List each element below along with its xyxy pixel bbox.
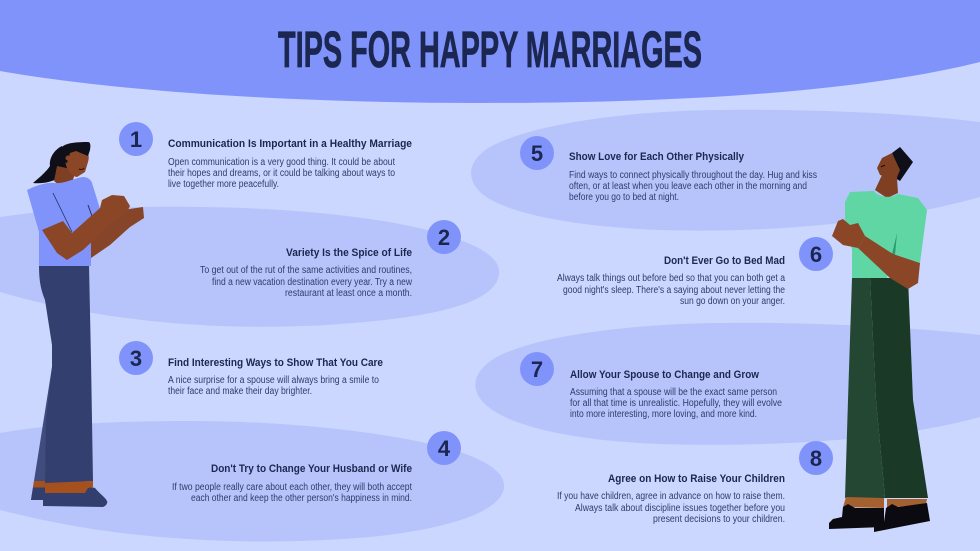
hair bbox=[60, 142, 90, 163]
body 5: often, or at least when you leave each other in the morning and bbox=[569, 181, 807, 192]
body 1: live together more peacefully. bbox=[168, 179, 279, 190]
shirt bbox=[845, 191, 927, 278]
body 2: To get out of the rut of the same activities and routines, bbox=[200, 265, 412, 276]
number badge 3: 3 bbox=[130, 346, 142, 371]
far arm bbox=[91, 207, 144, 258]
body 3: their face and make their day brighter. bbox=[168, 386, 312, 397]
far ankle bbox=[33, 481, 46, 488]
number badge 5: 5 bbox=[531, 141, 543, 166]
background blob: tip 2 bbox=[0, 207, 499, 327]
body 3 bbox=[168, 375, 379, 397]
trousers bbox=[39, 265, 93, 484]
smile bbox=[881, 165, 885, 167]
heading 3: Find Interesting Ways to Show That You Care bbox=[168, 357, 383, 369]
body 7: into more interesting, more loving, and more kind. bbox=[570, 409, 757, 420]
shirt bbox=[27, 177, 101, 266]
body 6: good night's sleep. There's a saying about never letting the bbox=[563, 285, 785, 296]
number badge 6: 6 bbox=[810, 242, 822, 267]
hand bbox=[832, 219, 865, 248]
number badge 6 bbox=[799, 237, 833, 271]
body 1 bbox=[168, 157, 395, 190]
tip 1 bbox=[119, 122, 412, 190]
body 6 bbox=[557, 273, 785, 307]
number badge 4: 4 bbox=[438, 436, 451, 461]
forearm bbox=[858, 236, 920, 289]
body 7: for all that time is unrealistic. Hopefully, they will evolve bbox=[570, 398, 782, 409]
number badge 8: 8 bbox=[810, 446, 822, 471]
heading 1: Communication Is Important in a Healthy Marriage bbox=[168, 138, 412, 150]
background blob: tip 4 bbox=[0, 421, 504, 542]
number badge 7: 7 bbox=[531, 357, 543, 382]
number badge 5 bbox=[520, 136, 554, 170]
tip 7 bbox=[520, 352, 782, 420]
hair back bbox=[33, 146, 68, 183]
ear bbox=[66, 156, 70, 160]
far leg bbox=[31, 367, 60, 500]
heading 7: Allow Your Spouse to Change and Grow bbox=[570, 369, 759, 381]
right shoe bbox=[874, 503, 930, 532]
neck bbox=[875, 175, 898, 198]
heading 2: Variety Is the Spice of Life bbox=[286, 247, 412, 259]
left shoe bbox=[829, 504, 884, 529]
near shoe bbox=[43, 487, 107, 507]
body 4: If two people really care about each other, they will both accept bbox=[172, 482, 412, 493]
illustration: woman bbox=[27, 142, 144, 507]
body 6: Always talk things out before bed so that you can both get a bbox=[557, 273, 785, 284]
heading 5: Show Love for Each Other Physically bbox=[569, 151, 745, 163]
body 8: Always talk about discipline issues together before you bbox=[575, 503, 785, 514]
hair bbox=[892, 147, 913, 181]
body 5: before you go to bed at night. bbox=[569, 192, 679, 203]
head bbox=[65, 148, 89, 177]
number badge 7 bbox=[520, 352, 554, 386]
number badge 2 bbox=[427, 220, 461, 254]
body 5 bbox=[569, 170, 817, 203]
body 6: sun go down on your anger. bbox=[680, 296, 785, 307]
number badge 4 bbox=[427, 431, 461, 465]
header banner bbox=[0, 0, 980, 103]
body 4 bbox=[172, 482, 412, 504]
background blob: tip 5 bbox=[471, 110, 980, 231]
smile bbox=[79, 168, 84, 170]
tip 4 bbox=[172, 431, 461, 504]
body 8: If you have children, agree in advance on how to raise them. bbox=[557, 491, 785, 502]
body 2: find a new vacation destination every year. Try a new bbox=[212, 277, 413, 288]
number badge 8 bbox=[799, 441, 833, 475]
tip 3 bbox=[119, 341, 383, 397]
number badge 2: 2 bbox=[438, 225, 450, 250]
near ankle bbox=[45, 481, 93, 493]
body 8: present decisions to your children. bbox=[653, 514, 785, 525]
background blob: tip 7 bbox=[475, 323, 980, 445]
number badge 1 bbox=[119, 122, 153, 156]
tip 8 bbox=[557, 441, 833, 525]
tip 5 bbox=[520, 136, 817, 203]
tip 2 bbox=[200, 220, 461, 299]
tip 6 bbox=[557, 237, 833, 307]
near arm bbox=[42, 195, 130, 260]
heading 6: Don't Ever Go to Bed Mad bbox=[664, 255, 785, 267]
heading 4: Don't Try to Change Your Husband or Wife bbox=[211, 463, 412, 475]
illustration: man bbox=[829, 147, 930, 532]
body 7: Assuming that a spouse will be the exact same person bbox=[570, 387, 777, 398]
number badge 1: 1 bbox=[130, 127, 142, 152]
body 8 bbox=[557, 491, 785, 525]
body 1: Open communication is a very good thing. It could be about bbox=[168, 157, 395, 168]
body 1: their hopes and dreams, or it could be talking about ways to bbox=[168, 168, 395, 179]
body 3: A nice surprise for a spouse will always bring a smile to bbox=[168, 375, 379, 386]
far shoe bbox=[31, 488, 45, 500]
heading 8: Agree on How to Raise Your Children bbox=[608, 473, 785, 485]
neck bbox=[54, 166, 76, 186]
body 5: Find ways to connect physically throughout the day. Hug and kiss bbox=[569, 170, 817, 181]
body 4: each other and keep the other person's happiness in mind. bbox=[191, 493, 412, 504]
body 2 bbox=[200, 265, 413, 299]
body 2: restaurant at least once a month. bbox=[285, 288, 412, 299]
number badge 3 bbox=[119, 341, 153, 375]
ankles bbox=[843, 497, 927, 508]
body 7 bbox=[570, 387, 782, 420]
trousers bbox=[852, 278, 928, 498]
head bbox=[877, 153, 900, 180]
